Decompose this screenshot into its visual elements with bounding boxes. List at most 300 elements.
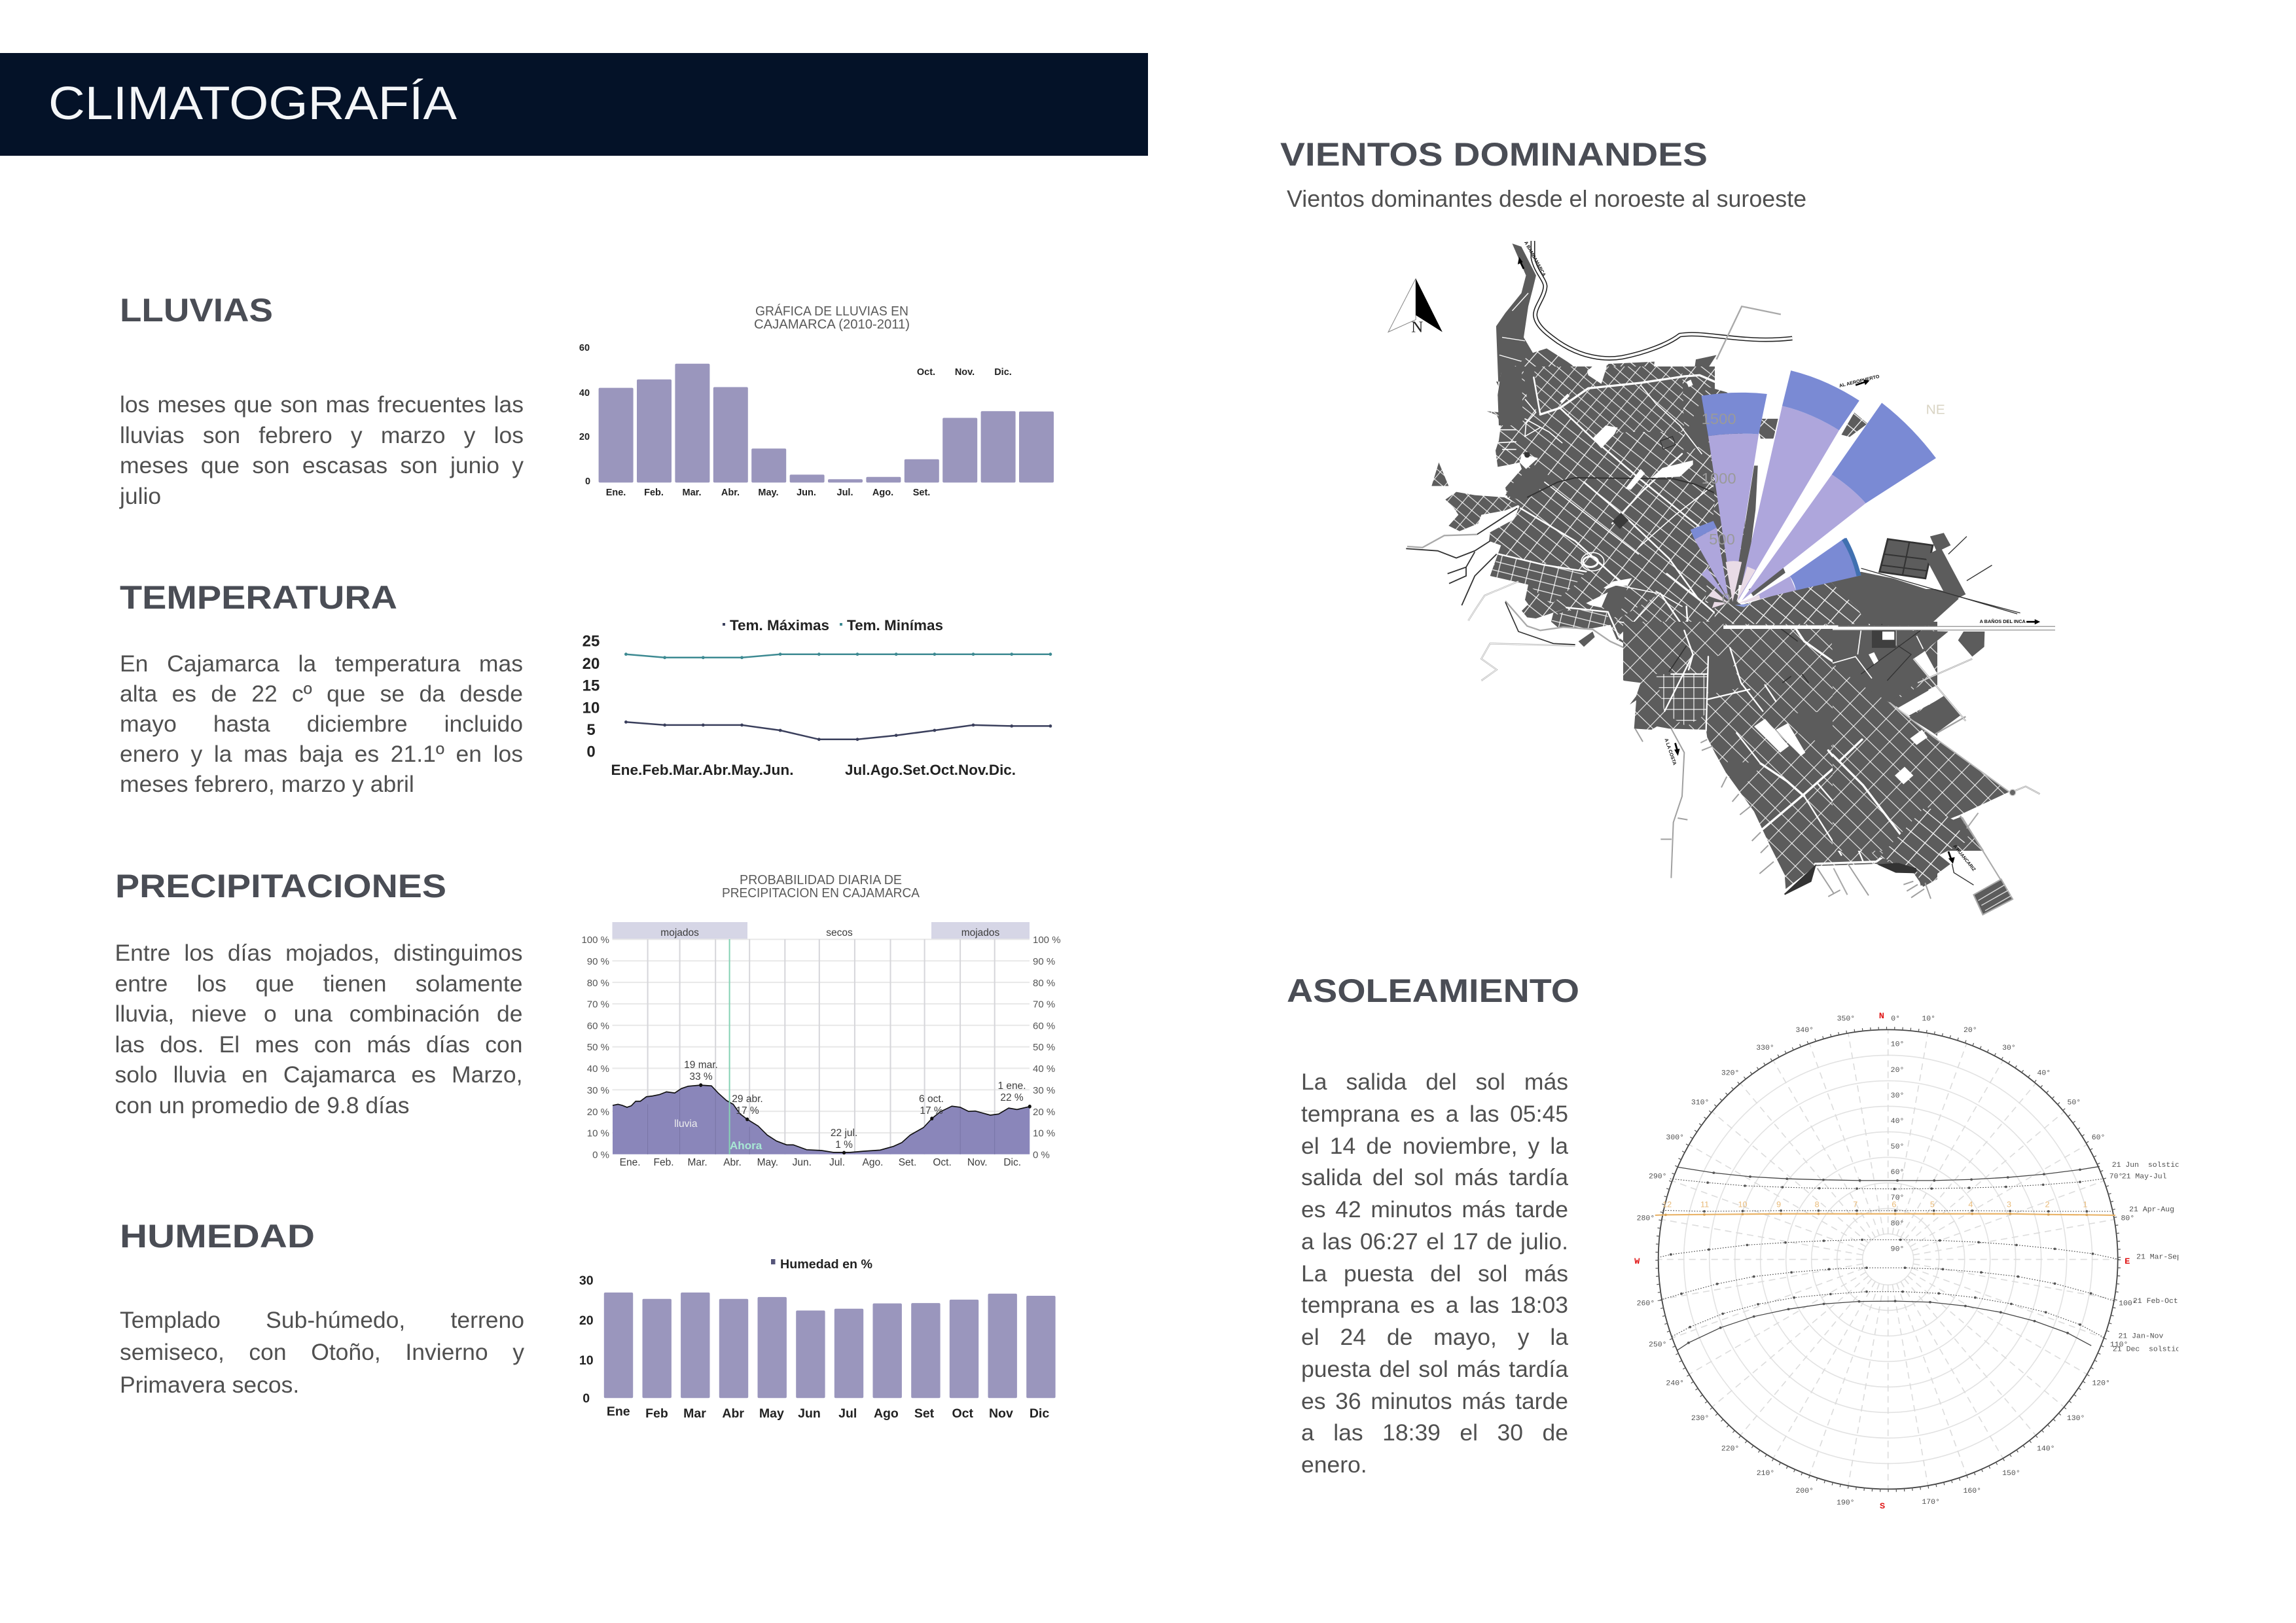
- west and centre of city: [1406, 366, 1715, 681]
- altitude labels: 70°: [1891, 1194, 1904, 1202]
- header banner: [0, 53, 1148, 156]
- temperature legend: Tem. Minímas: [847, 617, 943, 633]
- chart title: GRÁFICA DE LLUVIAS EN: [755, 304, 908, 319]
- north road: [1533, 241, 1792, 359]
- azimuth labels: 330°: [1756, 1044, 1774, 1052]
- data callouts: 1 %: [835, 1139, 853, 1150]
- data callouts: lluvia: [674, 1118, 698, 1130]
- temperature y axis: [583, 632, 600, 760]
- month labels: Ago.: [863, 1157, 883, 1168]
- y labels left: 100 %: [581, 935, 609, 946]
- icon: north arrow: N: [1411, 319, 1423, 336]
- text: precipitaciones: las dos. El mes con más días con: [115, 1031, 522, 1058]
- azimuth labels: 280°: [1637, 1215, 1655, 1222]
- text: asoleamiento: La salida del sol más: [1301, 1069, 1568, 1095]
- path labels: 21 Jan-Nov: [2119, 1333, 2164, 1340]
- rain axis labels: Feb.: [644, 488, 664, 498]
- rain axis labels: 0: [585, 476, 590, 487]
- azimuth labels: 160°: [1963, 1488, 1981, 1495]
- text: asoleamiento: el 14 de noviembre, y la: [1301, 1133, 1568, 1159]
- rain axis labels: Abr.: [721, 488, 740, 498]
- rose scale labels: 0: [1722, 591, 1731, 607]
- y labels left: 20 %: [587, 1107, 609, 1118]
- path labels: 21 Apr-Aug: [2129, 1206, 2174, 1214]
- y labels right: 0 %: [1033, 1149, 1050, 1161]
- western streams: [1406, 508, 1634, 681]
- chart: probabilidad de precipitación: [581, 873, 1061, 1168]
- text: lluvias: julio: [120, 483, 161, 509]
- azimuth labels: 170°: [1922, 1499, 1940, 1507]
- grey outer roads: [1913, 659, 2040, 851]
- azimuth labels: 140°: [2037, 1446, 2055, 1453]
- altitude labels: 80°: [1891, 1221, 1904, 1228]
- text: lluvias: [119, 391, 524, 509]
- line: mínimas: [624, 721, 1052, 741]
- cardinal points: W: [1634, 1257, 1640, 1266]
- y labels right: [1033, 935, 1061, 1161]
- western lobe: [1445, 492, 1518, 531]
- text: temperatura: mayo hasta diciembre incluido: [120, 711, 523, 737]
- azimuth labels: 350°: [1837, 1016, 1855, 1023]
- chart title: CAJAMARCA (2010-2011): [754, 317, 910, 332]
- altitude labels: 40°: [1891, 1118, 1904, 1126]
- main western mass: [1487, 366, 1715, 681]
- polar grid: [1657, 1028, 2119, 1490]
- text: asoleamiento: a las 06:27 el 17 de julio.: [1301, 1228, 1568, 1255]
- road labels: A LA COSTA: [1663, 738, 1678, 766]
- y labels right: 30 %: [1033, 1085, 1055, 1096]
- rain axis labels: Oct.: [917, 367, 935, 378]
- title: CLIMATOGRAFÍA: [48, 78, 457, 130]
- heading: lluvias: LLUVIAS: [120, 292, 273, 329]
- azimuth labels: 60°: [2092, 1134, 2105, 1142]
- orange current path: 8: [1815, 1200, 1820, 1209]
- road labels: A BAMBAMARCA: [1523, 240, 1547, 277]
- temperature legend: Tem. Máximas: [730, 617, 829, 633]
- rain axis labels: 20: [579, 432, 590, 442]
- data callouts: 19 mar.: [684, 1060, 718, 1071]
- orange current path: 3: [2007, 1200, 2011, 1209]
- cardinal points: [1634, 1011, 2130, 1511]
- spiral hill: [1581, 552, 1604, 571]
- chart title: PROBABILIDAD DIARIA DE: [740, 873, 902, 887]
- humidity labels: Feb: [645, 1406, 668, 1421]
- temperature y axis: 25: [583, 632, 600, 651]
- road labels: [1518, 240, 2040, 872]
- month labels: Jul.: [829, 1157, 845, 1168]
- azimuth labels: 200°: [1795, 1488, 1814, 1495]
- month labels: Oct.: [933, 1157, 952, 1168]
- grid: [613, 939, 1030, 1154]
- rain axis labels: Dic.: [994, 367, 1012, 378]
- petal: east: [1744, 538, 1861, 603]
- data callouts: 17 %: [736, 1105, 759, 1116]
- chart: temperatura: [583, 617, 1052, 778]
- y labels left: 80 %: [587, 978, 609, 989]
- text: asoleamiento: salida del sol más tardía: [1301, 1164, 1568, 1190]
- month labels: Set.: [899, 1157, 916, 1168]
- rain axis labels: 40: [579, 388, 590, 399]
- orange current path: 6: [1892, 1200, 1897, 1209]
- altitude labels: 10°: [1891, 1041, 1904, 1049]
- text: humedad: semiseco, con Otoño, Invierno y: [120, 1339, 524, 1365]
- top layer: blocks, rose and labels: [1388, 240, 2040, 915]
- month labels: Jun.: [793, 1157, 812, 1168]
- rain axis labels: Mar.: [682, 488, 702, 498]
- azimuth labels: 110°: [2110, 1342, 2128, 1349]
- rain axis labels: Jul.: [837, 488, 853, 498]
- temperature x axis: [611, 762, 1016, 778]
- heading: vientos dominandes: VIENTOS DOMINANDES: [1280, 136, 1708, 173]
- azimuth labels: [1637, 1016, 2137, 1507]
- sun labels and paths: [1634, 1011, 2185, 1511]
- fine mesh: [1846, 787, 1911, 859]
- field north of road: [1833, 589, 1959, 626]
- text: precipitaciones: [115, 940, 522, 1118]
- rain axis labels: Set.: [913, 488, 930, 498]
- azimuth labels: 290°: [1649, 1173, 1667, 1181]
- humidity labels: 10: [579, 1353, 594, 1368]
- altitude labels: 50°: [1891, 1143, 1904, 1151]
- chart: sun path diagram: [1634, 1011, 2185, 1511]
- rain axis labels: Ene.: [606, 488, 626, 498]
- open lots: [1487, 366, 1693, 646]
- season bands: mojados: [660, 927, 699, 938]
- solid blocks: [1498, 366, 1715, 622]
- azimuth labels: 50°: [2067, 1099, 2081, 1107]
- data callouts: 22 jul.: [831, 1128, 857, 1139]
- humidity labels: May: [759, 1406, 784, 1421]
- data callouts: Ahora: [730, 1139, 762, 1152]
- text: asoleamiento: puesta del sol más tardía: [1301, 1356, 1568, 1382]
- text: precipitaciones: solo lluvia en Cajamarca es Marzo,: [115, 1061, 522, 1088]
- cardinal points: S: [1880, 1502, 1885, 1511]
- text: lluvias: los meses que son mas frecuentes las: [120, 391, 524, 418]
- humidity labels: Dic: [1030, 1406, 1049, 1421]
- data callouts: 22 %: [1000, 1092, 1024, 1103]
- humidity labels: Abr: [722, 1406, 744, 1421]
- humidity bars: [604, 1293, 1056, 1398]
- orange current path: 12: [1662, 1200, 1672, 1209]
- precipitation area: [613, 1083, 1031, 1154]
- y labels right: 80 %: [1033, 978, 1055, 989]
- south of city: [1623, 622, 1937, 899]
- rain axis labels: Ago.: [872, 488, 893, 498]
- rain axis labels: [579, 343, 1012, 498]
- azimuth labels: 210°: [1757, 1470, 1774, 1478]
- complex: [1869, 630, 1896, 664]
- text: temperatura: meses febrero, marzo y abril: [120, 771, 414, 797]
- season bands: secos: [826, 927, 853, 938]
- y labels left: 10 %: [587, 1128, 609, 1139]
- text: humedad: Templado Sub-húmedo, terreno: [120, 1307, 524, 1333]
- orange current path: 2: [2045, 1200, 2050, 1209]
- rose scale labels: NE: [1926, 402, 1945, 417]
- open lots: [1895, 730, 1928, 784]
- path labels: 21 Dec solstice: [2113, 1346, 2185, 1354]
- text: temperatura: enero y la mas baja es 21.1º en los: [120, 741, 523, 767]
- text: precipitaciones: con un promedio de 9.8 días: [115, 1092, 409, 1118]
- altitude labels: 20°: [1891, 1067, 1904, 1075]
- azimuth labels: 240°: [1666, 1380, 1684, 1388]
- y labels right: 50 %: [1033, 1042, 1055, 1053]
- cardinal points: E: [2125, 1257, 2130, 1266]
- humidity labels: [579, 1274, 1049, 1421]
- humidity labels: Ago: [874, 1406, 899, 1421]
- humidity labels: Ene: [607, 1404, 630, 1419]
- field lines: [1833, 589, 2020, 792]
- humidity legend: Humedad en %: [780, 1258, 872, 1272]
- petal: north-north-east: [1738, 370, 1859, 601]
- chart title: [754, 304, 910, 332]
- south east tail: striped block: [1952, 864, 2013, 915]
- rose scale labels: 500: [1709, 531, 1735, 548]
- orange current path: 7: [1853, 1200, 1857, 1209]
- south tail blocks: [1834, 806, 2013, 899]
- altitude labels: 90°: [1891, 1246, 1904, 1253]
- southwest mesh: [1490, 554, 1586, 604]
- azimuth labels: 320°: [1721, 1070, 1739, 1078]
- y labels left: 50 %: [587, 1042, 609, 1053]
- road labels: A BAÑOS DEL INCA: [1980, 618, 2026, 624]
- season bands: mojados: [961, 927, 1000, 938]
- line: máximas: [624, 652, 1052, 659]
- petal: small west: [1701, 568, 1729, 601]
- rose scale labels: 1000: [1702, 471, 1736, 487]
- orange current path: 1: [2083, 1200, 2088, 1209]
- temperature y axis: 10: [583, 699, 600, 717]
- orange current path: [1655, 1200, 2115, 1215]
- road to Baños del Inca, east section: [1833, 622, 2055, 635]
- temperature y axis: 20: [583, 655, 600, 673]
- map: Cajamarca with wind rose: [1388, 240, 2055, 915]
- text: asoleamiento: es 36 minutos más tarde: [1301, 1388, 1568, 1414]
- orange current path: 5: [1930, 1200, 1935, 1209]
- rain bars: [599, 364, 1054, 482]
- northern fine mesh: [1534, 366, 1684, 437]
- rain axis labels: Jun.: [797, 488, 816, 498]
- petal: north-west: [1691, 521, 1729, 601]
- text: lluvias: lluvias son febrero y marzo y los: [120, 422, 524, 448]
- dark accents: [1785, 860, 1937, 895]
- azimuth labels: 40°: [2037, 1070, 2051, 1078]
- azimuth labels: 80°: [2121, 1215, 2134, 1222]
- y labels left: [581, 935, 609, 1161]
- orange current path: 10: [1738, 1200, 1748, 1209]
- azimuth labels: 150°: [2002, 1470, 2020, 1478]
- text: asoleamiento: La puesta del sol más: [1301, 1260, 1568, 1287]
- y labels left: 70 %: [587, 999, 609, 1010]
- road labels: A HUANCARIZ: [1952, 844, 1977, 872]
- humidity labels: Jul: [838, 1406, 857, 1421]
- heading: humedad: HUMEDAD: [120, 1218, 315, 1255]
- data callouts: 1 ene.: [997, 1080, 1026, 1092]
- text: asoleamiento: enero.: [1301, 1452, 1367, 1478]
- humidity labels: Oct: [952, 1406, 973, 1421]
- humidity labels: Jun: [798, 1406, 821, 1421]
- month labels: Nov.: [967, 1157, 988, 1168]
- rose centre: [1709, 561, 1760, 608]
- path labels: 21 May-Jul: [2122, 1173, 2167, 1181]
- azimuth labels: 260°: [1637, 1300, 1655, 1308]
- north strip: [1496, 243, 1536, 386]
- text: temperatura: [120, 651, 523, 797]
- data callouts: [674, 1060, 1026, 1152]
- azimuth labels: 30°: [2002, 1044, 2016, 1052]
- text: precipitaciones: Entre los días mojados, distinguimos: [115, 940, 522, 966]
- humidity labels: Mar: [683, 1406, 706, 1421]
- chart: gráfica de lluvias: [579, 304, 1054, 498]
- "now" marker: [729, 939, 730, 1154]
- orthogonal centre: [1656, 674, 1708, 726]
- azimuth labels: 310°: [1691, 1099, 1709, 1107]
- azimuth labels: 130°: [2067, 1415, 2085, 1423]
- text: asoleamiento: a las 18:39 el 30 de: [1301, 1419, 1568, 1446]
- azimuth labels: 70°: [2109, 1173, 2123, 1181]
- text: temperatura: En Cajamarca la temperatura mas: [120, 651, 523, 677]
- open lots: [1754, 650, 1937, 784]
- heading: asoleamiento: ASOLEAMIENTO: [1287, 972, 1579, 1009]
- dark square and circle: [1524, 437, 1676, 529]
- cardinal points: N: [1879, 1011, 1884, 1021]
- azimuth labels: 0°: [1891, 1016, 1900, 1023]
- temperature y axis: 15: [583, 677, 600, 695]
- wind rose: [1691, 370, 1945, 608]
- road labels: AL AEROPUERTO: [1839, 373, 1880, 389]
- solid fields: [1833, 630, 1984, 851]
- heading: temperatura: TEMPERATURA: [120, 579, 397, 616]
- rain axis labels: 60: [579, 343, 590, 353]
- y labels left: 0 %: [592, 1149, 609, 1161]
- chart: humedad: [579, 1258, 1056, 1421]
- rain axis labels: Nov.: [955, 367, 975, 378]
- season bands: [613, 922, 1030, 939]
- text: lluvias: meses que son escasas son junio y: [120, 452, 524, 478]
- month labels: May.: [757, 1157, 778, 1168]
- chart title: PRECIPITACION EN CAJAMARCA: [722, 886, 920, 901]
- avenues: [1833, 740, 2009, 840]
- temperature x axis: Jul.Ago.Set.Oct.Nov.Dic.: [845, 762, 1016, 778]
- chart title: [722, 873, 920, 901]
- azimuth labels: 10°: [1922, 1016, 1935, 1023]
- road to the coast and edge stubs: [1635, 728, 1931, 899]
- humidity labels: Set: [914, 1406, 935, 1421]
- month labels: Abr.: [723, 1157, 742, 1168]
- y labels left: 90 %: [587, 956, 609, 967]
- temperature legend: [723, 617, 943, 633]
- altitude labels: [1891, 1041, 1903, 1251]
- district: behind the rose: [1705, 386, 1867, 603]
- south-east mass: [1833, 630, 2009, 851]
- month labels: Ene.: [620, 1157, 641, 1168]
- text: asoleamiento: temprana es a las 18:03: [1301, 1292, 1568, 1318]
- road to Baños del Inca, west section: [1723, 624, 1839, 630]
- text: humedad: [120, 1307, 524, 1398]
- path labels: [2113, 1162, 2178, 1351]
- y labels right: 70 %: [1033, 999, 1055, 1010]
- humidity labels: 30: [579, 1274, 594, 1288]
- azimuth labels: 120°: [2092, 1380, 2110, 1388]
- text: asoleamiento: el 24 de mayo, y la: [1301, 1324, 1568, 1350]
- data callouts: 29 abr.: [732, 1094, 763, 1105]
- orange current path: 11: [1700, 1200, 1709, 1209]
- solstice and month paths: [1658, 1166, 2119, 1351]
- azimuth labels: 220°: [1721, 1446, 1739, 1453]
- y labels right: 60 %: [1033, 1021, 1055, 1031]
- y labels left: 30 %: [587, 1085, 609, 1096]
- text: humedad: Primavera secos.: [120, 1372, 299, 1398]
- avenues: [1664, 628, 1937, 868]
- azimuth labels: 190°: [1837, 1499, 1855, 1507]
- month labels: Feb.: [653, 1157, 674, 1168]
- grid below the rose, filling to the road: [1715, 582, 1867, 624]
- altitude labels: 60°: [1891, 1169, 1904, 1177]
- southern lobe: [1551, 609, 1615, 628]
- text: temperatura: alta es de 22 cº que se da desde: [120, 681, 523, 707]
- path labels: 21 Feb-Oct: [2133, 1298, 2178, 1306]
- data callouts: 33 %: [689, 1071, 713, 1082]
- text: asoleamiento: temprana es a las 05:45: [1301, 1101, 1568, 1127]
- y labels right: 90 %: [1033, 956, 1055, 967]
- east field: [1831, 572, 1958, 624]
- northern district: [1512, 348, 1728, 421]
- y labels right: 10 %: [1033, 1128, 1055, 1139]
- azimuth labels: 250°: [1649, 1342, 1667, 1349]
- southern mass: [1623, 622, 1937, 889]
- orange current path: 9: [1776, 1200, 1781, 1209]
- azimuth labels: 340°: [1795, 1027, 1814, 1035]
- text: asoleamiento: es 42 minutos más tarde: [1301, 1196, 1568, 1222]
- heading: precipitaciones: PRECIPITACIONES: [115, 868, 446, 904]
- altitude labels: 30°: [1891, 1092, 1904, 1100]
- y labels right: 20 %: [1033, 1107, 1055, 1118]
- east of city: [1833, 589, 2055, 851]
- temperature x axis: Ene.Feb.Mar.Abr.May.Jun.: [611, 762, 793, 778]
- petal: north: [1701, 393, 1767, 601]
- text: vientos description: Vientos dominantes desde el noroeste al suroeste: [1287, 185, 1806, 212]
- text: precipitaciones: lluvia, nieve o una combinación de: [115, 1001, 522, 1027]
- temperature y axis: 5: [586, 721, 596, 739]
- path labels: 21 Jun solstice: [2112, 1162, 2184, 1169]
- humidity labels: Nov: [989, 1406, 1013, 1421]
- temperature y axis: 0: [586, 743, 596, 760]
- text: precipitaciones: entre los que tienen solamente: [115, 970, 522, 996]
- minor outlying road: [1717, 306, 1781, 359]
- rain axis labels: May.: [758, 488, 779, 498]
- orange current path: 4: [1968, 1200, 1973, 1209]
- azimuth labels: 20°: [1964, 1027, 1977, 1035]
- azimuth labels: 230°: [1691, 1415, 1709, 1423]
- humidity labels: 20: [579, 1313, 594, 1328]
- y labels left: 40 %: [587, 1063, 609, 1075]
- north of map: [1496, 241, 1792, 421]
- month labels: Dic.: [1003, 1157, 1021, 1168]
- y labels left: 60 %: [587, 1021, 609, 1031]
- month labels: Mar.: [688, 1157, 708, 1168]
- dark cross road: [1527, 478, 1715, 497]
- y labels right: 40 %: [1033, 1063, 1055, 1075]
- humidity labels: 0: [583, 1391, 590, 1406]
- isolated triangle block: [1431, 463, 1448, 486]
- parking block: [1861, 533, 2017, 614]
- y labels right: 100 %: [1033, 935, 1061, 946]
- petal: north-east: [1742, 403, 1936, 601]
- south-east roundabout: [2009, 789, 2016, 796]
- azimuth labels: 300°: [1666, 1134, 1684, 1142]
- solid blocks: [1707, 628, 1861, 790]
- data callouts: 17 %: [920, 1105, 943, 1116]
- path labels: 21 Mar-Sep: [2136, 1254, 2181, 1261]
